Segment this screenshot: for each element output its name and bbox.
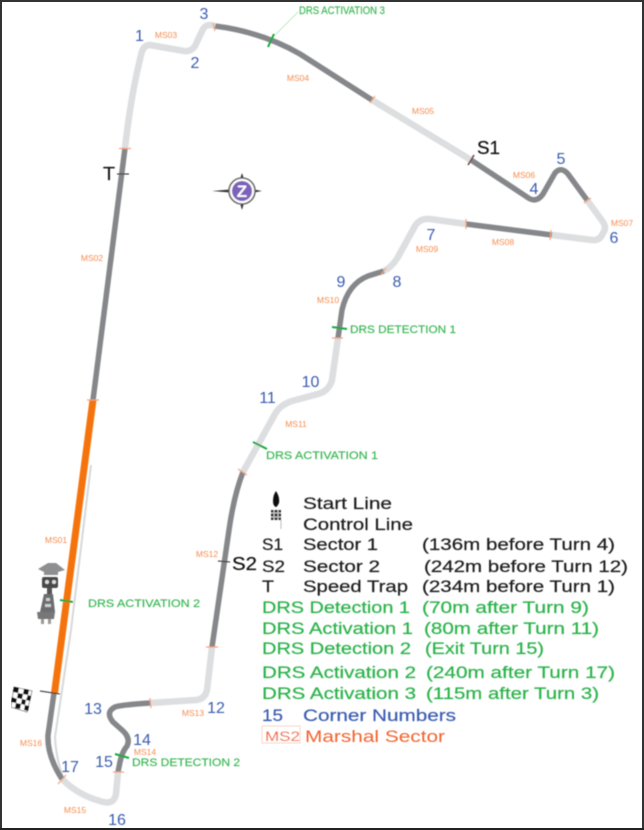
segment: MS06	[471, 160, 587, 200]
legend: marshal sector row	[262, 726, 445, 746]
marshal sector labels: MS16	[20, 738, 42, 748]
icon: compass: Z	[237, 182, 247, 201]
icon: race car	[37, 563, 65, 624]
legend: DRS rows: DRS Detection 1	[262, 598, 410, 617]
timing marks	[40, 174, 230, 694]
DRS activation 3 leader and tick	[268, 12, 298, 47]
legend: corner numbers row: Corner Numbers	[303, 706, 456, 725]
segment: MS10	[338, 271, 384, 338]
corner numbers: 9	[337, 274, 346, 291]
DRS labels	[88, 5, 456, 769]
segment: MS12	[212, 472, 243, 647]
corner numbers: 17	[61, 759, 79, 776]
timing labels: S2	[232, 554, 257, 574]
legend: black rows: S2	[262, 557, 285, 576]
legend: DRS rows: (80m after Turn 11)	[424, 619, 599, 638]
corner numbers: 16	[108, 812, 126, 829]
marshal sector labels: MS04	[287, 73, 309, 83]
marshal sector ticks	[58, 23, 591, 784]
corner numbers: 10	[302, 374, 320, 391]
segment: MS15	[62, 772, 118, 802]
marshal sector labels: MS02	[81, 253, 103, 263]
legend: corner numbers row	[262, 706, 456, 725]
segment: MS14 and start of MS13	[109, 703, 150, 772]
legend: black rows: T	[262, 577, 274, 596]
timing labels	[103, 138, 500, 574]
segment: MS16	[48, 693, 62, 779]
segment: MS01 orange DRS straight	[54, 400, 93, 693]
legend: DRS rows: DRS Detection 2	[262, 639, 411, 658]
corner numbers: 11	[259, 390, 276, 407]
marshal sector labels: MS09	[416, 244, 438, 254]
segment: MS13	[150, 647, 212, 703]
legend	[262, 491, 628, 746]
segment: MS03	[125, 25, 215, 148]
marshal sector labels: MS06	[513, 170, 535, 180]
timing labels: T	[103, 164, 115, 184]
DRS labels: DRS DETECTION 1	[350, 324, 456, 336]
legend: marshal sector row: Marshal Sector	[305, 727, 445, 746]
legend: black rows: (234m before Turn 1)	[422, 577, 615, 596]
marshal sector labels: MS11	[285, 419, 307, 429]
legend: black rows: (242m before Turn 12)	[424, 557, 628, 576]
legend: DRS rows: (240m after Turn 17)	[426, 663, 615, 682]
marshal sector labels: MS13	[182, 708, 204, 718]
corner numbers: 13	[84, 701, 102, 718]
marshal sector labels: MS07	[611, 218, 633, 228]
timing labels: S1	[477, 138, 500, 158]
DRS tick marks	[60, 327, 347, 758]
legend: black rows: Sector 2	[303, 557, 380, 576]
segment: MS04	[215, 26, 372, 100]
corner numbers: 6	[610, 230, 619, 247]
marshal sector labels: MS14	[134, 747, 156, 757]
DRS labels: DRS ACTIVATION 3	[299, 5, 385, 17]
DRS labels: DRS DETECTION 2	[132, 757, 240, 769]
marshal sector labels: MS03	[155, 30, 177, 40]
legend: DRS rows: (70m after Turn 9)	[422, 598, 589, 617]
segment: MS02	[93, 148, 125, 400]
legend: DRS rows: DRS Activation 2	[262, 663, 416, 682]
legend: DRS rows: DRS Activation 3	[262, 684, 416, 703]
icon: chequered flag	[11, 687, 32, 712]
corner numbers: 4	[530, 181, 539, 198]
legend: DRS rows: DRS Activation 1	[262, 619, 413, 638]
legend: black rows: Start Line	[303, 494, 392, 513]
corner numbers: 15	[95, 754, 113, 771]
icon: start line marker	[271, 491, 281, 529]
legend: DRS rows	[262, 598, 615, 703]
marshal sector labels: MS15	[64, 805, 86, 815]
corner numbers: 14	[133, 732, 151, 749]
legend: black rows: S1	[262, 535, 283, 554]
marshal sector labels: MS05	[412, 106, 434, 116]
DRS labels: DRS ACTIVATION 2	[88, 598, 200, 610]
DRS labels: DRS ACTIVATION 1	[266, 450, 378, 462]
corner numbers: 7	[427, 227, 436, 244]
marshal sector labels: MS12	[196, 549, 218, 559]
segment: MS07	[552, 200, 605, 240]
legend: corner numbers row: 15	[262, 706, 283, 725]
corner numbers: 8	[393, 274, 402, 291]
legend: black rows	[262, 494, 628, 596]
corner numbers: 12	[207, 700, 225, 717]
corner numbers: 1	[135, 28, 144, 45]
legend: black rows: Sector 1	[303, 535, 378, 554]
legend: DRS rows: (Exit Turn 15)	[425, 639, 544, 658]
corner numbers: 5	[557, 151, 566, 168]
corner numbers: 3	[200, 6, 209, 23]
legend: black rows: Speed Trap	[303, 577, 408, 596]
segment: MS05	[372, 100, 471, 160]
legend: DRS rows: (115m after Turn 3)	[426, 684, 599, 703]
legend: marshal sector row: MS2	[265, 728, 300, 744]
marshal sector labels: MS01	[45, 535, 67, 545]
icon: compass	[212, 173, 262, 210]
corner numbers: 2	[191, 55, 200, 72]
pit lane	[55, 465, 91, 778]
marshal sector labels: MS08	[492, 237, 514, 247]
legend: black rows: Control Line	[303, 515, 413, 534]
marshal sector labels: MS10	[317, 295, 339, 305]
segment: MS11	[243, 338, 338, 472]
segment: MS08	[466, 224, 552, 235]
legend: black rows: (136m before Turn 4)	[422, 535, 615, 554]
segment: MS09	[384, 219, 466, 271]
